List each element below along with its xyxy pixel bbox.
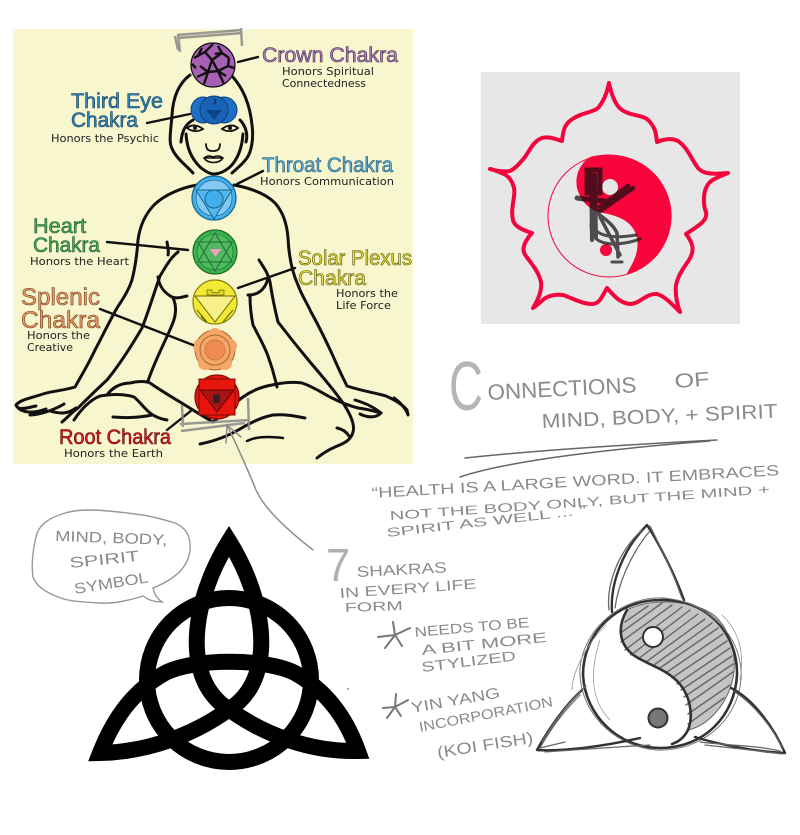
note: yin yang incorporation: INCORPORATION	[418, 693, 554, 735]
chakra: solar plexus	[193, 280, 237, 324]
label: solar plexus: Solar Plexus	[298, 247, 412, 270]
label: third eye	[51, 90, 163, 145]
right loop	[695, 688, 785, 753]
label: crown: Honors Spiritual	[282, 66, 374, 78]
label: throat: Honors Communication	[260, 176, 394, 188]
label: root: Root Chakra	[59, 426, 171, 449]
label: solar plexus: Honors the	[336, 288, 398, 300]
title: connections of mind, body, + spirit: ONNECTIONS	[487, 372, 637, 405]
note: yin yang incorporation: (KOI FISH)	[436, 730, 534, 762]
speech bubble: mind, body, spirit symbol: MIND, BODY,	[55, 528, 167, 549]
note: needs to be a bit more stylized: A BIT MORE	[421, 629, 548, 658]
title: connections of mind, body, + spirit	[449, 347, 778, 433]
top loop	[612, 525, 684, 612]
note: needs to be a bit more stylized: NEEDS TO BE	[414, 614, 530, 640]
face features	[187, 125, 238, 162]
sketch: triquetra with yin yang	[537, 525, 785, 754]
label: heart: Chakra	[33, 234, 100, 257]
label: throat: Throat Chakra	[262, 154, 393, 177]
sketch bracket: root	[180, 398, 250, 431]
label: heart: Honors the Heart	[30, 256, 129, 268]
label: third eye: Third Eye	[71, 90, 163, 113]
label: splenic: Honors the	[27, 330, 90, 342]
underline strokes	[460, 440, 717, 477]
yin yang symbol	[548, 155, 672, 277]
label: splenic: Chakra	[21, 307, 101, 334]
chakra: root	[195, 375, 239, 419]
label: throat	[260, 154, 394, 188]
title: connections of mind, body, + spirit: OF	[674, 369, 710, 393]
note: 7 chakras	[326, 539, 477, 615]
panel: logo concept	[481, 72, 740, 324]
chakra: crown	[191, 43, 235, 87]
label: splenic: Creative	[27, 342, 73, 354]
note: yin yang incorporation: YIN YANG	[410, 685, 501, 717]
label: root: Honors the Earth	[64, 448, 163, 460]
note: needs to be a bit more stylized	[378, 614, 548, 675]
panel: chakra chart	[13, 28, 413, 464]
label: solar plexus: Chakra	[298, 267, 366, 290]
label: heart	[30, 215, 129, 268]
lotus outline	[490, 83, 728, 312]
note: 7 chakras: FORM	[345, 598, 403, 615]
note: 7 chakras: 7	[326, 539, 350, 591]
shaded yin half	[621, 602, 734, 730]
quote text	[371, 462, 780, 540]
label: root	[59, 426, 171, 460]
title: connections of mind, body, + spirit: C	[449, 347, 483, 425]
speech bubble: mind, body, spirit symbol: SYMBOL	[73, 569, 150, 598]
hatch strokes	[621, 603, 733, 724]
note: 7 chakras: SHAKRAS	[356, 559, 447, 581]
icon: star	[378, 622, 410, 648]
speech bubble: mind, body, spirit symbol	[32, 510, 190, 603]
sketch bracket: crown	[175, 28, 242, 52]
label: third eye: Honors the Psychic	[51, 133, 159, 145]
label: heart: Heart	[33, 215, 86, 238]
quote text: NOT THE BODY ONLY, BUT THE MIND +	[389, 482, 770, 523]
arrow: sketch line from 7 chakras to root chakra	[226, 425, 313, 550]
triquetra symbol	[100, 541, 358, 762]
chakra: third eye	[191, 96, 237, 124]
stray dot	[347, 688, 349, 690]
chakra: throat	[192, 176, 236, 220]
label: third eye: Chakra	[71, 109, 138, 132]
note: needs to be a bit more stylized: STYLIZED	[420, 648, 517, 675]
label: solar plexus: Life Force	[336, 300, 391, 312]
left loop	[537, 690, 640, 750]
label: crown	[262, 44, 398, 90]
quote text: “HEALTH IS A LARGE WORD. IT EMBRACES	[371, 462, 780, 502]
speech bubble: mind, body, spirit symbol: SPIRIT	[69, 548, 140, 572]
title: connections of mind, body, + spirit: MIND, BODY, + SPIRIT	[541, 401, 778, 433]
ink glyph overlay	[577, 170, 640, 262]
label: splenic	[21, 284, 101, 354]
chakra: splenic	[193, 328, 237, 370]
yin yang dots	[643, 627, 663, 647]
circle outline	[583, 600, 737, 748]
label: crown: Crown Chakra	[262, 44, 398, 67]
s curve	[621, 610, 691, 744]
leader lines	[100, 57, 295, 430]
note: 7 chakras: IN EVERY LIFE	[339, 575, 477, 601]
label: splenic: Splenic	[21, 284, 100, 311]
chakra: heart	[193, 230, 237, 274]
icon: star	[383, 694, 408, 718]
note: yin yang incorporation	[383, 685, 554, 762]
label: crown: Connectedness	[282, 78, 366, 90]
quote text: SPIRIT AS WELL ... ”	[386, 503, 587, 540]
seated figure outline	[16, 75, 408, 458]
label: solar plexus	[298, 247, 412, 312]
